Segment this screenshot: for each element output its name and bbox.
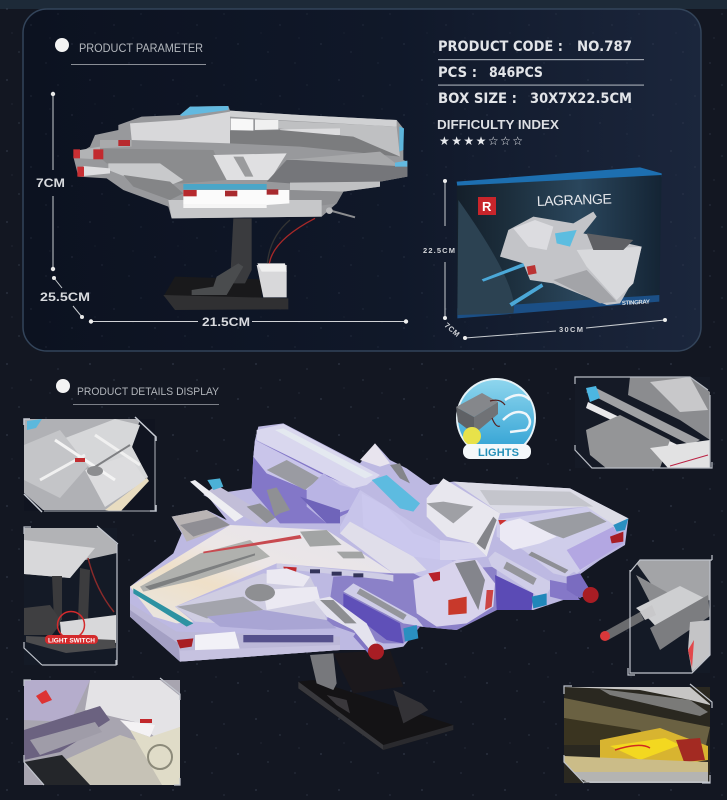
rear fin <box>172 510 230 542</box>
icon: lights badge <box>456 379 535 459</box>
central fuselage <box>340 478 500 577</box>
detail inset: light switch <box>24 526 118 665</box>
upper left wing <box>252 424 380 523</box>
spec: pcs <box>438 65 543 81</box>
width dimension: 21.5CM <box>89 317 408 329</box>
stand <box>298 650 453 750</box>
cockpit canopy <box>372 475 420 512</box>
box dimensions <box>423 179 667 340</box>
light switch circle <box>58 612 84 638</box>
box logo: R <box>482 199 492 214</box>
detail inset: lower deck <box>24 678 180 785</box>
box dimensions: 30CM <box>559 325 583 334</box>
detail inset: interior lights <box>564 684 712 783</box>
lower deck <box>130 603 340 662</box>
box dimensions: 7CM <box>443 321 461 339</box>
box title: LAGRANGE <box>537 190 612 209</box>
heading: product details display <box>56 379 220 405</box>
right pods <box>488 547 599 610</box>
icon: lights badge: LIGHTS <box>478 447 519 459</box>
depth dimension: 25.5CM: 25.5CM <box>40 292 90 304</box>
box exhaust <box>482 262 528 282</box>
heading: product details display: PRODUCT DETAILS DISPLAY <box>77 386 220 398</box>
spec: box size: 30X7X22.5CM <box>530 91 632 107</box>
rear aerial <box>328 210 355 217</box>
product box <box>457 167 662 318</box>
silhouette <box>130 423 628 662</box>
main model <box>130 423 628 750</box>
spec: product code <box>438 39 632 55</box>
engines <box>80 147 100 159</box>
left cannon <box>190 478 277 525</box>
display stand <box>163 218 315 310</box>
left wing <box>130 525 393 623</box>
spec: difficulty index: DIFFICULTY INDEX <box>437 118 560 132</box>
lower left hull <box>133 568 337 630</box>
panel: product parameter <box>23 9 701 351</box>
detail inset: wing underside <box>24 417 156 512</box>
depth dimension: 25.5CM <box>40 276 90 319</box>
light switch label: LIGHT SWITCH <box>48 638 95 644</box>
box dimensions: 22.5CM <box>423 246 455 255</box>
right wing <box>453 482 628 573</box>
hull <box>73 106 407 218</box>
side view model <box>73 106 407 310</box>
box logo <box>478 197 496 215</box>
nose <box>413 560 495 627</box>
heading: product parameter: PRODUCT PARAMETER <box>79 43 203 55</box>
difficulty stars: ★★★★☆☆☆ <box>439 134 523 148</box>
spec: product code: NO.787 <box>577 39 632 55</box>
box ship <box>500 212 642 305</box>
height dimension: 7CM: 7CM <box>36 178 65 190</box>
box badge: STINGRAY <box>622 300 650 307</box>
detail inset: top detail <box>575 377 712 468</box>
spec: box size <box>438 91 632 107</box>
canopy peak <box>360 443 390 467</box>
height dimension: 7CM <box>36 92 65 271</box>
cannon barrel <box>604 612 644 640</box>
central pods <box>313 583 423 660</box>
spec: pcs: 846PCS <box>489 65 543 81</box>
cockpit <box>180 106 228 116</box>
spec: product code: PRODUCT CODE : <box>438 39 563 55</box>
width dimension: 21.5CM: 21.5CM <box>202 317 250 329</box>
spec: pcs: PCS : <box>438 65 477 81</box>
tail lights <box>399 127 404 152</box>
heading: product parameter <box>55 38 206 65</box>
detail inset: cannon <box>600 555 712 675</box>
spec: box size: BOX SIZE : <box>438 91 517 107</box>
